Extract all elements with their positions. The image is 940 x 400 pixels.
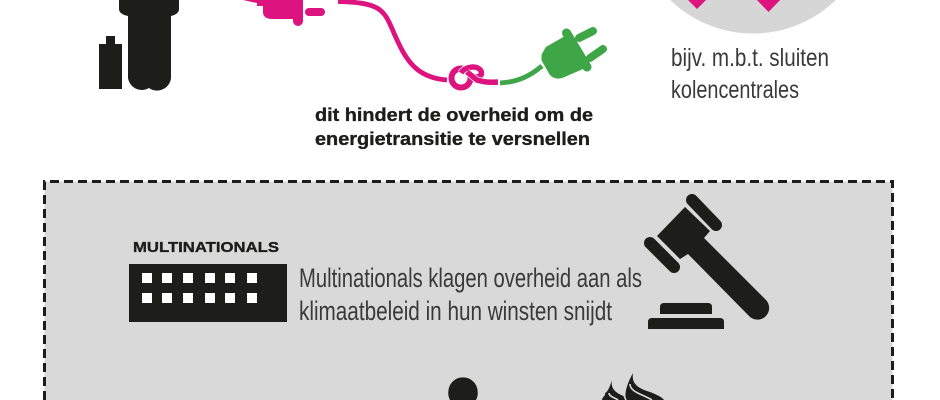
icon: cable with knot xyxy=(338,2,542,88)
text: example coal plants: bijv. m.b.t. sluiten xyxy=(671,44,829,72)
text: hinders government xyxy=(315,105,593,149)
text: example coal plants xyxy=(671,44,829,104)
text: hinders government: dit hindert de overheid om de xyxy=(315,105,593,125)
icon: building xyxy=(129,264,287,322)
text: hinders government: energietransitie te versnellen xyxy=(315,129,590,149)
icon: flames xyxy=(602,373,664,400)
icon: pink plug xyxy=(243,0,325,26)
icon: person head xyxy=(448,377,478,400)
icon: green plug xyxy=(543,31,603,77)
panel: dashed grey box xyxy=(44,182,892,400)
text: example coal plants: kolencentrales xyxy=(671,76,799,104)
heading: multinationals: MULTINATIONALS xyxy=(133,239,279,256)
icon: battery xyxy=(99,36,122,89)
icon: gavel xyxy=(648,200,769,329)
icon: person legs xyxy=(119,0,179,91)
text: multinationals sue government xyxy=(299,263,642,326)
text: multinationals sue government: Multinationals klagen overheid aan als xyxy=(299,263,642,293)
icon: grey circle with pink hearts xyxy=(634,0,872,34)
text: multinationals sue government: klimaatbeleid in hun winsten snijdt xyxy=(299,296,612,326)
